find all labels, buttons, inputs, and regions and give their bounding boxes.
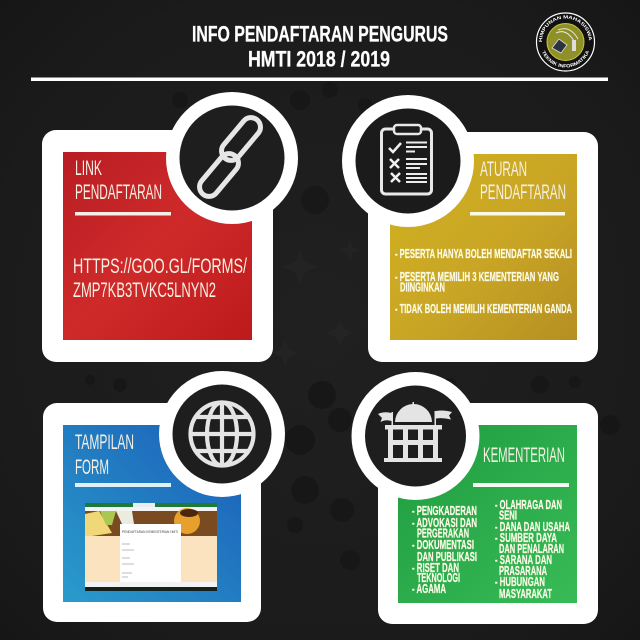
green panel — [398, 425, 577, 603]
ministries column 1: - AGAMA — [412, 581, 446, 596]
ministries column 1: - ADVOKASI DAN — [412, 515, 477, 530]
ministries column 1: DAN PUBLIKASI — [417, 549, 477, 564]
heading — [480, 157, 566, 204]
ministries column 2: PRASARANA — [499, 563, 547, 578]
panel: tampilan form — [43, 371, 285, 622]
heading: PENDAFTARAN — [480, 180, 566, 204]
heading underline — [75, 483, 171, 487]
form screenshot: PENDAFTARAN KEMENTERIAN HMTI — [122, 530, 178, 534]
panel: kementerian — [352, 372, 598, 624]
ministries column 2: - SUMBER DAYA — [495, 530, 557, 545]
heading: TAMPILAN — [75, 430, 134, 454]
panel: aturan pendaftaran — [342, 95, 598, 362]
ministries column 2: - DANA DAN USAHA — [495, 519, 570, 534]
logo: TEKNIK INFORMATIKA — [542, 50, 590, 68]
ministries column 1 — [412, 503, 477, 596]
link url: ZMP7KB3TVKC5LNYN2 — [73, 278, 216, 302]
link url: HTTPS://GOO.GL/FORMS/ — [73, 254, 247, 278]
rules list — [395, 246, 572, 316]
ministries column 1: TEKNOLOGI — [417, 570, 460, 585]
heading: KEMENTERIAN — [483, 443, 565, 467]
blue panel — [63, 425, 241, 602]
icon: globe — [159, 371, 285, 497]
ministries column 1: - DOKUMENTASI — [412, 537, 474, 552]
logo — [536, 12, 596, 72]
ministries column 2: SENI — [499, 508, 517, 522]
logo: HIMPUNAN MAHASISWA — [538, 15, 592, 42]
ministries column 1: PERGERAKAN — [417, 526, 469, 540]
icon: chain link — [166, 92, 298, 224]
ministries column 2: - HUBUNGAN — [495, 574, 545, 589]
heading: ATURAN — [480, 157, 527, 181]
heading — [75, 430, 134, 479]
red panel — [63, 152, 252, 340]
form screenshot — [85, 503, 217, 591]
link url — [73, 254, 247, 302]
icon: parliament building — [352, 372, 480, 500]
card frame — [42, 130, 273, 362]
heading: PENDAFTARAN — [75, 180, 162, 204]
ministries column 2: DAN PENALARAN — [499, 541, 564, 556]
ministries column 1: - RISET DAN — [412, 560, 459, 575]
heading underline — [470, 212, 565, 216]
ministries column 2: MASYARAKAT — [499, 586, 552, 601]
ministries column 2 — [495, 497, 570, 601]
title divider — [31, 78, 608, 81]
icon: clipboard checklist — [342, 95, 474, 227]
heading underline — [75, 212, 171, 216]
card frame — [378, 403, 598, 624]
ministries column 2: - OLAHRAGA DAN — [495, 497, 562, 512]
title: HMTI 2018 / 2019 — [248, 46, 390, 72]
yellow panel — [390, 154, 577, 340]
heading — [75, 156, 162, 204]
card frame — [368, 132, 598, 362]
ministries column 2: - SARANA DAN — [495, 552, 552, 567]
heading: LINK — [75, 156, 102, 180]
title — [192, 22, 448, 72]
rules list: DIINGINKAN — [400, 280, 445, 294]
panel: link pendaftaran — [42, 92, 298, 362]
title: INFO PENDAFTARAN PENGURUS — [192, 22, 448, 46]
ministries column 1: - PENGKADERAN — [412, 503, 477, 518]
heading underline — [473, 483, 569, 487]
heading: FORM — [75, 455, 109, 479]
card frame — [43, 403, 261, 622]
